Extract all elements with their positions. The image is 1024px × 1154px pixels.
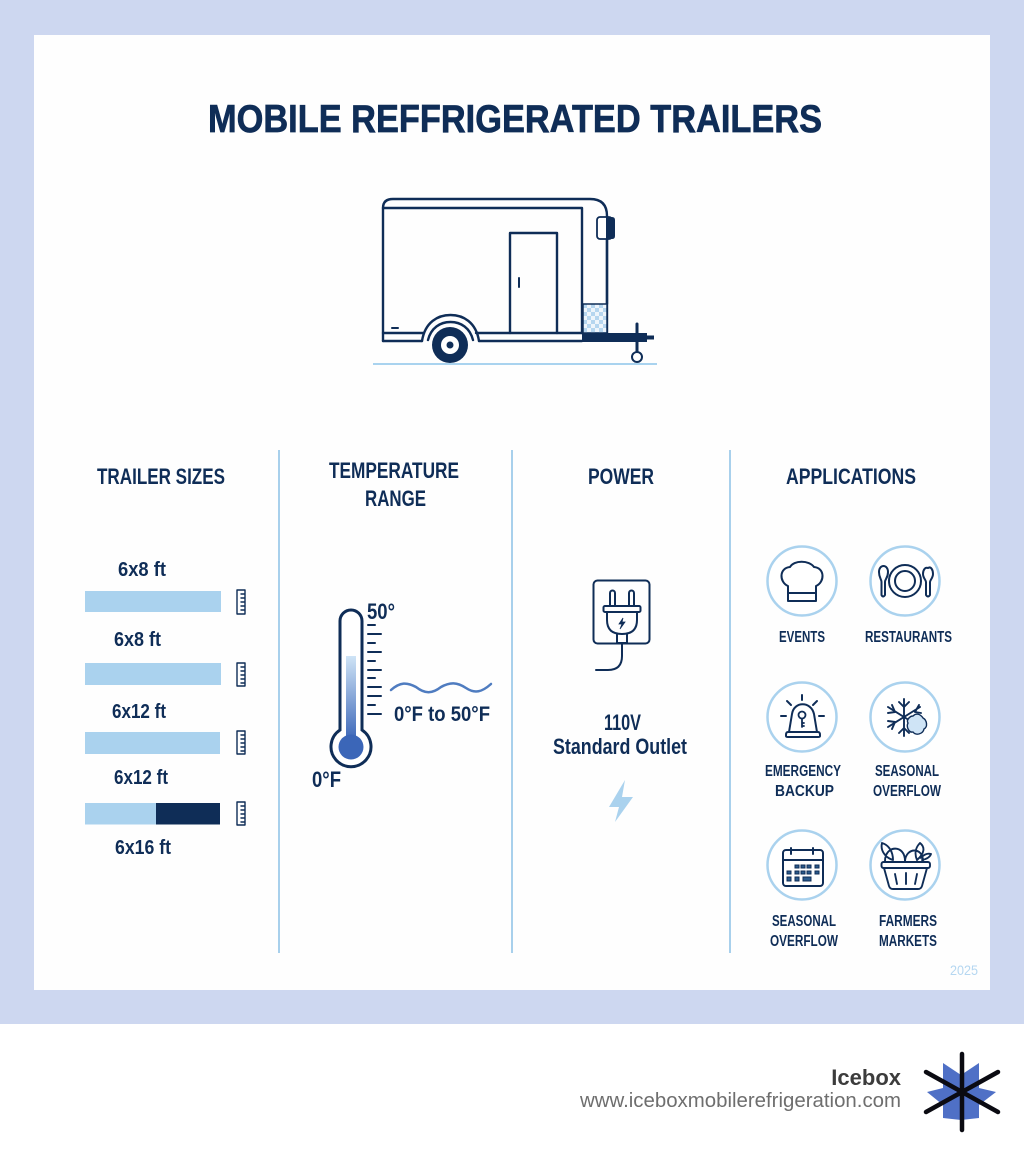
size row 4 <box>85 767 245 859</box>
heading: temperature range: TEMPERATURE <box>329 458 459 483</box>
application: events <box>768 546 836 646</box>
heading: temperature range: RANGE <box>365 486 426 511</box>
icon: plug and outlet <box>594 580 650 670</box>
icon: lightning bolt <box>609 780 633 822</box>
range label: 0°F to 50°F <box>394 703 490 726</box>
heading: trailer sizes: TRAILER SIZES <box>97 464 225 489</box>
year label: 2025 <box>950 962 978 978</box>
heading: applications: APPLICATIONS <box>786 464 916 489</box>
column dividers <box>279 450 730 953</box>
size row 1: 6x8 ft <box>118 559 166 581</box>
footer brand name: Icebox <box>831 1065 902 1090</box>
application: seasonal overflow calendar <box>768 830 838 950</box>
size row 4: 6x12 ft <box>114 767 168 789</box>
application: emergency backup: BACKUP <box>775 783 834 800</box>
size row 2: 6x8 ft <box>114 629 161 651</box>
application: restaurants <box>865 546 952 646</box>
application: seasonal overflow calendar: SEASONAL <box>772 913 836 930</box>
label: 50 degrees: 50° <box>367 599 395 624</box>
label: 0F: 0°F <box>312 767 341 792</box>
panel: power <box>553 464 688 822</box>
application: seasonal overflow snowflake: OVERFLOW <box>873 783 941 800</box>
size row 4: 6x16 ft <box>115 837 171 859</box>
title: MOBILE REFFRIGERATED TRAILERS <box>208 98 822 141</box>
size row 3 <box>85 701 245 754</box>
panel: temperature range <box>312 458 491 792</box>
trailer illustration <box>373 199 657 365</box>
application: farmers markets basket: FARMERS <box>879 913 937 930</box>
application: emergency backup <box>765 682 842 800</box>
application: farmers markets basket <box>870 830 940 950</box>
size row 3: 6x12 ft <box>112 701 166 723</box>
white card panel <box>34 35 990 990</box>
icon: thermometer <box>331 610 381 767</box>
wave <box>391 683 491 692</box>
application: seasonal overflow snowflake: SEASONAL <box>875 763 939 780</box>
logo: snowflake <box>926 1054 998 1130</box>
application: seasonal overflow snowflake <box>870 682 941 800</box>
size row 1 <box>85 559 245 614</box>
power value: Standard Outlet <box>553 734 688 759</box>
size row 2 <box>85 629 245 686</box>
application: events: EVENTS <box>779 629 825 646</box>
application: emergency backup: EMERGENCY <box>765 763 842 780</box>
application: farmers markets basket: MARKETS <box>879 933 937 950</box>
power value: 110V <box>604 710 641 735</box>
panel: applications <box>765 464 952 950</box>
panel: trailer sizes <box>85 464 245 859</box>
application: seasonal overflow calendar: OVERFLOW <box>770 933 838 950</box>
application: restaurants: RESTAURANTS <box>865 629 952 646</box>
heading: power: POWER <box>588 464 654 489</box>
footer url: www.iceboxmobilerefrigeration.com <box>579 1090 901 1112</box>
